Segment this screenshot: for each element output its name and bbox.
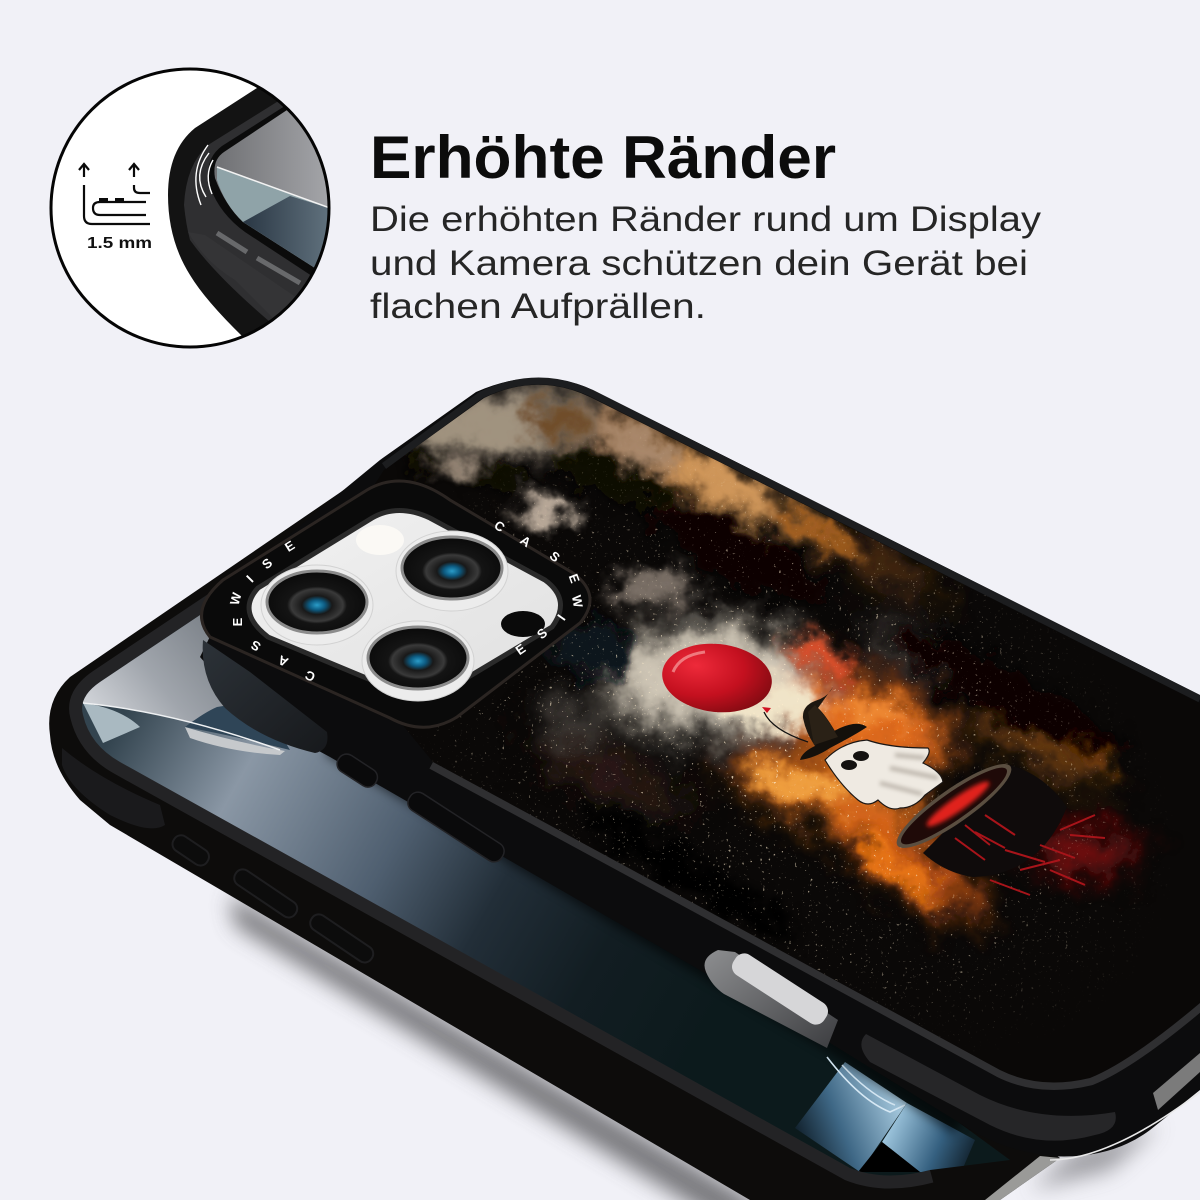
description text: und Kamera schützen dein Gerät bei bbox=[370, 244, 1028, 283]
panel: back phone case bbox=[49, 470, 1060, 1200]
sensor hole bbox=[501, 611, 545, 637]
speaker grill bbox=[1153, 1053, 1200, 1110]
lower corner grill bbox=[985, 1156, 1060, 1200]
panel: raised edge detail circle bbox=[51, 69, 345, 347]
side lighter panel bbox=[62, 748, 165, 828]
description text: flachen Aufprällen. bbox=[370, 287, 706, 326]
CASEWISE ring lettering: E bbox=[513, 640, 529, 658]
bump side sheen bbox=[203, 640, 328, 753]
flash bbox=[356, 525, 404, 555]
case side buttons bbox=[334, 751, 838, 1048]
shadow under front phone bbox=[1030, 1125, 1160, 1190]
CASEWISE ring lettering: S bbox=[534, 625, 551, 642]
CASEWISE ring lettering: C bbox=[302, 667, 318, 685]
description text bbox=[370, 200, 1042, 326]
silver power button bbox=[704, 950, 838, 1048]
CASEWISE ring lettering: S bbox=[248, 637, 263, 655]
CASEWISE ring lettering: A bbox=[275, 652, 291, 670]
camera lens top bbox=[396, 531, 508, 611]
CASEWISE ring lettering: E bbox=[282, 537, 298, 555]
camera lens bottom bbox=[362, 621, 474, 701]
icon: raised edge diagram bbox=[79, 164, 150, 224]
back phone screen bbox=[82, 615, 1010, 1176]
impact arcs bbox=[196, 145, 213, 205]
shadow of front phone on back screen bbox=[330, 745, 960, 1125]
label: 1.5 mm: 1.5 mm bbox=[87, 235, 152, 252]
CASEWISE ring lettering: S bbox=[547, 548, 563, 565]
panel: phone case artwork bbox=[280, 370, 1200, 1100]
CASEWISE ring lettering: E bbox=[230, 617, 245, 626]
front case top rim bbox=[384, 381, 1200, 699]
inner bezel lip bbox=[82, 595, 930, 1176]
painted nebula clouds bbox=[399, 386, 1135, 952]
CASEWISE ring lettering: I bbox=[243, 572, 256, 585]
side highlight panel bbox=[861, 1034, 1116, 1141]
phone corner close-up bbox=[168, 88, 328, 336]
camera lens left bbox=[261, 565, 373, 645]
case rim highlight bbox=[433, 762, 1200, 1082]
CASEWISE ring lettering: W bbox=[569, 594, 586, 609]
title: Erhöhte Ränder bbox=[370, 124, 836, 191]
panel: front phone case bbox=[200, 378, 1200, 1160]
description text: Die erhöhten Ränder rund um Display bbox=[370, 200, 1042, 239]
CASEWISE ring lettering: C bbox=[491, 517, 508, 536]
CASEWISE ring lettering: E bbox=[566, 572, 583, 585]
CASEWISE ring lettering: W bbox=[227, 590, 245, 607]
back phone buttons bbox=[169, 832, 376, 966]
balloon bbox=[659, 638, 808, 742]
CASEWISE ring lettering: S bbox=[259, 555, 276, 572]
volume button bbox=[404, 789, 508, 865]
CASEWISE ring lettering: I bbox=[554, 612, 568, 623]
cauldron bbox=[896, 764, 1106, 896]
mute switch button bbox=[334, 751, 381, 791]
wallpaper blue highlights bbox=[795, 1062, 907, 1172]
ghost with witch hat bbox=[800, 687, 943, 809]
CASEWISE ring lettering bbox=[227, 517, 586, 685]
star speckles bbox=[408, 434, 1168, 1047]
panel: camera module bbox=[202, 481, 590, 727]
CASEWISE ring lettering: A bbox=[517, 532, 534, 551]
shadow under back phone bbox=[230, 895, 770, 1200]
